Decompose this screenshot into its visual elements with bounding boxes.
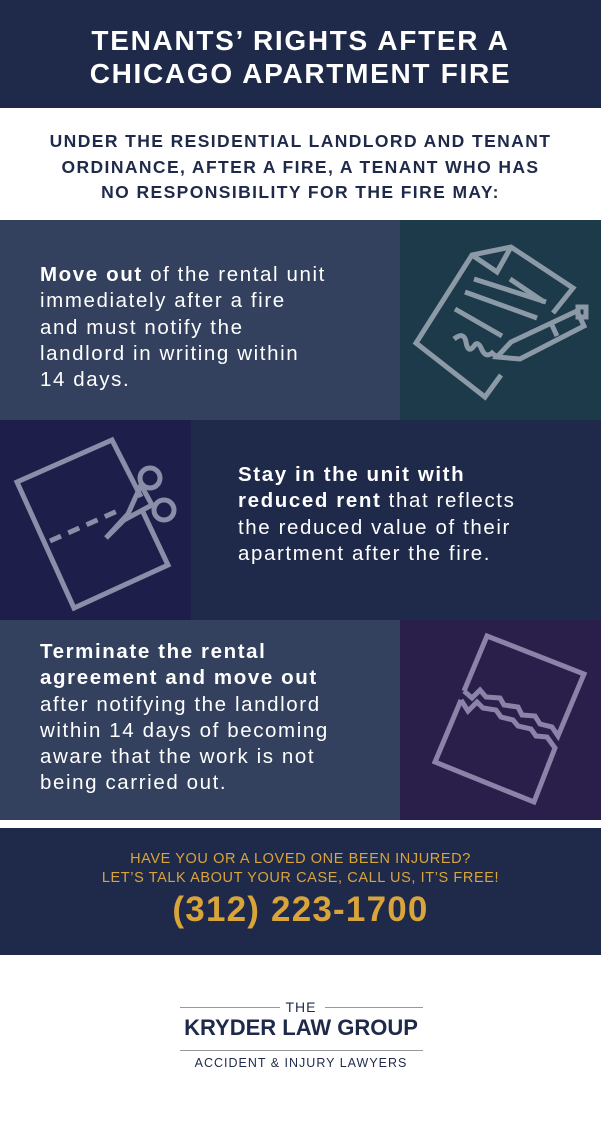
text: terminate: after notifying the landlord (40, 693, 321, 716)
panel: move out (0, 220, 601, 420)
title: CHICAGO APARTMENT FIRE (90, 58, 511, 89)
title: TENANTS’ RIGHTS AFTER A (91, 25, 510, 56)
text: reduced rent: Stay in the unit with (238, 463, 465, 486)
icon: document and pen (400, 220, 601, 420)
text: terminate (40, 640, 329, 794)
logo: THE (286, 999, 316, 1015)
logo: KRYDER LAW GROUP (184, 1015, 418, 1040)
icon: torn paper (400, 620, 601, 820)
CTA text: HAVE YOU OR A LOVED ONE BEEN INJURED? (130, 851, 471, 867)
title (90, 25, 511, 89)
text: reduced rent: apartment after the fire. (238, 542, 491, 565)
text: terminate: agreement and move out (40, 666, 318, 689)
phone number: (312) 223-1700 (172, 890, 429, 929)
text: reduced rent: the reduced value of their (238, 516, 511, 539)
CTA box (0, 828, 601, 955)
CTA text (102, 851, 499, 886)
text: terminate: aware that the work is not (40, 745, 315, 768)
panel: reduced rent (0, 420, 601, 620)
logo: ACCIDENT & INJURY LAWYERS (195, 1056, 407, 1070)
CTA text: LET’S TALK ABOUT YOUR CASE, CALL US, IT’S FREE! (102, 870, 499, 886)
subtitle: NO RESPONSIBILITY FOR THE FIRE MAY: (101, 182, 500, 202)
subtitle: ORDINANCE, AFTER A FIRE, A TENANT WHO HAS (61, 156, 540, 176)
text: terminate: within 14 days of becoming (40, 719, 329, 742)
text: reduced rent: reduced rent that reflects (238, 489, 515, 512)
panel: terminate (0, 620, 601, 820)
text: move out (40, 263, 326, 391)
text: move out: and must notify the (40, 316, 244, 339)
text: move out: immediately after a fire (40, 289, 286, 312)
logo (180, 999, 423, 1070)
subtitle (50, 131, 551, 202)
icon: scissors cutting paper (0, 420, 191, 620)
text: terminate: being carried out. (40, 771, 227, 794)
text: move out: landlord in writing within (40, 342, 299, 365)
text: move out: 14 days. (40, 368, 130, 391)
header (0, 0, 601, 108)
text: reduced rent (238, 463, 515, 565)
text: terminate: Terminate the rental (40, 640, 266, 663)
text: move out: Move out of the rental unit (40, 263, 326, 286)
subtitle: UNDER THE RESIDENTIAL LANDLORD AND TENANT (50, 131, 551, 151)
